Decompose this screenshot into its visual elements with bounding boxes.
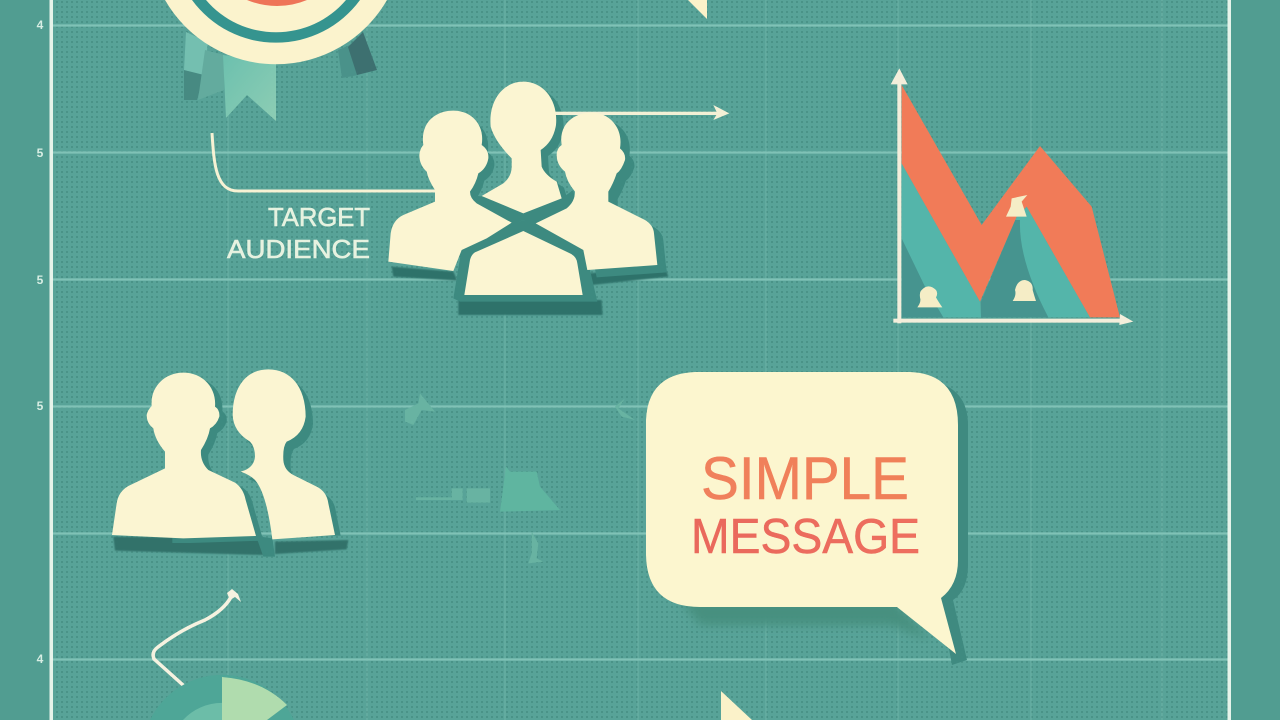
person: right [536, 113, 657, 270]
pie inner [183, 703, 261, 720]
ghost: tower [500, 467, 560, 512]
chart marker: left [917, 286, 942, 307]
two people ground shadow [113, 537, 348, 555]
chart marker: peak [1006, 195, 1027, 217]
axis tick labels: 5 [37, 273, 44, 287]
person: woman [233, 369, 335, 539]
label: target audience: TARGET [268, 202, 370, 232]
axis tick labels: 4 [37, 652, 44, 666]
area: teal middle [981, 207, 1090, 317]
bubble text: SIMPLE [701, 445, 909, 512]
label: target audience: AUDIENCE [227, 234, 370, 264]
target inner ring [206, 0, 346, 32]
pie slice: highlight [222, 677, 287, 720]
bubble right shadow [925, 380, 968, 665]
ribbon: faint left tail [198, 50, 224, 100]
person: man [112, 373, 256, 538]
label: target audience [227, 202, 370, 264]
ribbon: left dark tail [184, 70, 204, 100]
arrow: target to audience connector [212, 133, 436, 191]
man shadow [154, 377, 263, 543]
ghost: left mark [405, 393, 435, 425]
axis tick labels [37, 18, 44, 666]
pie base [150, 675, 294, 720]
bubble body [646, 372, 958, 654]
target outer ring [165, 0, 387, 64]
ribbon: right dark tail [348, 32, 377, 75]
ghost: lower mark [528, 532, 543, 563]
axis tick labels: 5 [37, 146, 44, 160]
pie chart [150, 675, 294, 720]
icon: group of three people [388, 82, 729, 315]
axis tick labels: 5 [37, 399, 44, 413]
person: back [482, 82, 562, 213]
bubble underside shadow [680, 600, 930, 640]
faint ghost icons in the centre [405, 393, 635, 563]
icon: two people [112, 369, 348, 557]
chart axes [891, 68, 1133, 325]
area: teal left [902, 163, 981, 317]
target teal ring [192, 0, 360, 43]
person: front [464, 231, 583, 295]
woman shadow [240, 377, 341, 536]
area: orange [902, 85, 1120, 317]
separating strip [256, 536, 275, 557]
speech bubble tip at bottom [721, 691, 752, 720]
person: left [388, 111, 512, 271]
speech bubble tail at top [688, 0, 707, 19]
target bullseye [247, 0, 307, 6]
speech bubble: simple message [646, 372, 968, 665]
ribbon: right faint tail [338, 45, 358, 78]
chart marker: middle [1013, 280, 1036, 301]
ghost: small bars [416, 488, 490, 503]
people ground shadows [392, 267, 668, 315]
ribbon: centre [223, 55, 276, 121]
arrow: curved line to pie chart [153, 589, 241, 685]
area: dark left [902, 238, 943, 317]
people soft shadows [425, 88, 667, 302]
speech bubble: simple message: MESSAGE [691, 510, 920, 564]
ghost: right mark [615, 398, 635, 420]
ribbon: left light tail [184, 32, 208, 75]
area chart [891, 68, 1133, 325]
area: dark middle [981, 220, 1048, 317]
arrow: from group to the right [555, 105, 729, 120]
icon: target with ribbons [165, 0, 387, 121]
axis tick labels: 4 [37, 18, 44, 32]
